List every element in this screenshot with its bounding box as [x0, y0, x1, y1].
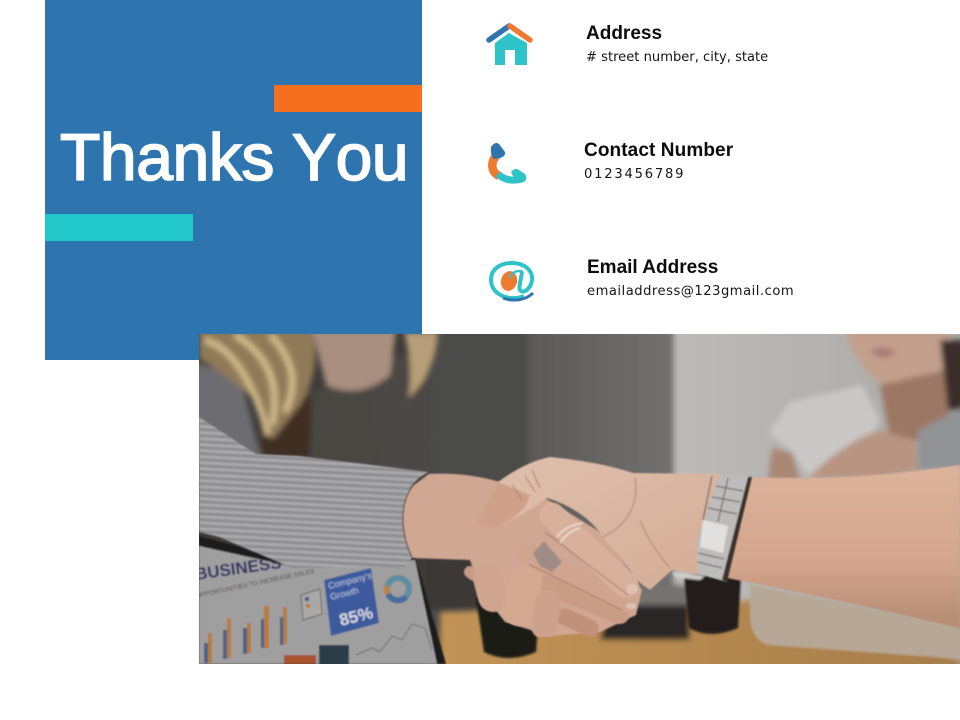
handshake — [470, 457, 722, 628]
laptop — [750, 585, 960, 659]
tablet line chart — [356, 624, 432, 655]
heading: address: Address — [586, 23, 662, 44]
coffee cups — [476, 572, 741, 658]
icon: phone — [488, 143, 526, 184]
heading: contact number: Contact Number — [584, 140, 733, 161]
fingernails — [626, 584, 638, 609]
tablet legend — [301, 589, 322, 620]
tablet donut chart — [387, 578, 409, 600]
photo: handshake — [199, 334, 960, 664]
background wall — [190, 325, 960, 675]
left sleeve — [199, 417, 429, 568]
left forearm and hand back — [403, 473, 642, 636]
accent bar: orange — [274, 85, 422, 112]
fingers: gripped hand — [530, 515, 628, 615]
woman right: face, shirt and hands — [768, 325, 960, 480]
text: address value: # street number, city, state — [586, 50, 768, 65]
table — [440, 585, 960, 670]
contact: phone — [488, 140, 733, 184]
heading: email address: Email Address — [587, 257, 718, 278]
woman left: sweater and hair — [195, 330, 438, 480]
text: phone value: 0123456789 — [584, 167, 685, 182]
tablet — [194, 536, 446, 665]
icon: at sign — [489, 261, 534, 302]
icon: house — [486, 23, 533, 65]
contact: address — [486, 23, 768, 65]
right forearm — [727, 465, 960, 628]
tablet card: growth — [324, 568, 379, 636]
panel: blue title block — [45, 0, 422, 360]
tablet thumbnails — [284, 645, 349, 665]
ring — [557, 523, 583, 543]
text: email value: emailaddress@123gmail.com — [587, 284, 794, 299]
tablet card: growth: Growth — [329, 585, 360, 602]
wristwatch — [697, 474, 752, 582]
title: Thanks You — [60, 120, 408, 194]
tablet card: growth: Company's — [327, 570, 373, 591]
tablet card: growth: 85% — [337, 603, 375, 630]
palm and thumb — [478, 457, 722, 590]
tablet bar chart — [204, 606, 287, 663]
tattoo — [533, 541, 562, 572]
accent bar: teal — [45, 214, 193, 241]
fingers: wrapping hand — [470, 572, 590, 628]
contact: email — [489, 257, 794, 302]
